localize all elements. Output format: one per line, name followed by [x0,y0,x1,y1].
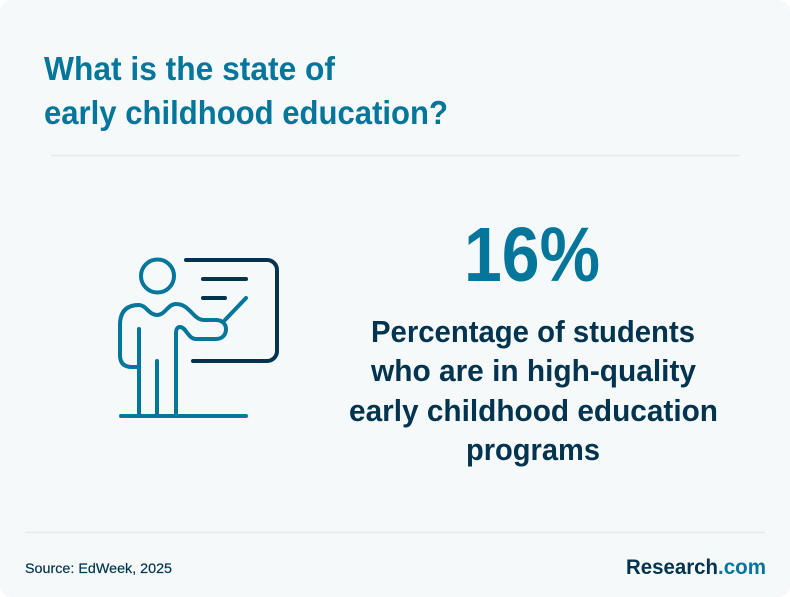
logo: Research.com [626,556,766,579]
logo: Research.com: .com [718,556,766,579]
logo: Research.com: Research [626,556,718,579]
icon: board [186,260,277,361]
title: early childhood education? [44,94,448,131]
title: What is the state of [44,50,336,87]
icon: teacher pointing at board [120,260,277,416]
statistic description: programs [466,432,600,467]
source note: Source: EdWeek, 2025 [25,560,172,576]
statistic description [349,314,718,467]
title [44,50,448,131]
statistic: 16%: 16% [464,212,600,298]
statistic description: early childhood education [349,393,718,428]
statistic description: Percentage of students [371,314,695,349]
statistic description: who are in high-quality [370,353,697,388]
icon: teacher figure [120,260,246,416]
